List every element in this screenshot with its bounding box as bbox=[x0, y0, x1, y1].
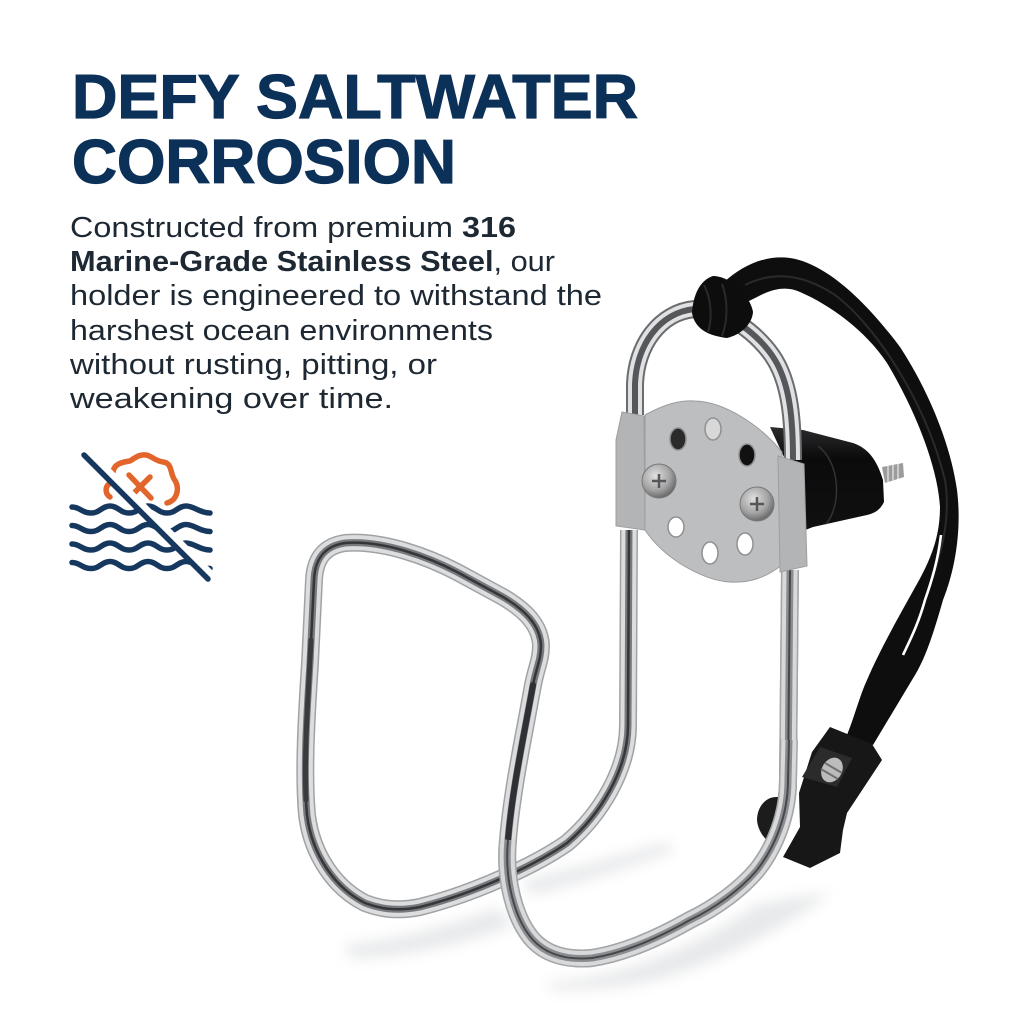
set screw window bbox=[802, 747, 852, 787]
cord strand highlight bbox=[745, 276, 947, 570]
title bbox=[72, 63, 638, 197]
icon: navy waves bbox=[72, 506, 210, 568]
floor shadows bbox=[345, 842, 830, 990]
pan head screws bbox=[642, 464, 774, 521]
icon: no corrosion over waves bbox=[72, 455, 212, 579]
icon: navy slash bbox=[84, 455, 208, 579]
body text block: Constructed from premium 316 bbox=[70, 212, 516, 244]
plate holes bbox=[668, 418, 755, 564]
body text block: without rusting, pitting, or bbox=[69, 349, 438, 381]
threaded bolt bbox=[882, 463, 904, 483]
icon: orange corrosion cloud with x bbox=[106, 455, 177, 503]
bungee cord bbox=[722, 257, 959, 745]
side brackets bbox=[616, 412, 807, 572]
title: CORROSION bbox=[72, 128, 456, 197]
icon: white gap beside slash bbox=[92, 455, 212, 575]
black cord hook bbox=[757, 727, 882, 868]
product photo: stainless holder with bungee cord bbox=[305, 257, 959, 990]
dark reflection on center run bbox=[508, 685, 533, 840]
wire frame full run bbox=[305, 530, 790, 958]
wire frame front run at crossing bbox=[507, 570, 790, 958]
body text block: Marine-Grade Stainless Steel , our bbox=[70, 246, 556, 278]
mounting plate with holes bbox=[645, 401, 782, 582]
tube section over hook bbox=[757, 740, 789, 870]
dark reflection on left side bbox=[305, 640, 311, 800]
black mount block bbox=[770, 427, 904, 532]
body text block: harshest ocean environments bbox=[70, 315, 493, 347]
title: DEFY SALTWATER bbox=[72, 63, 638, 132]
cord split gap bbox=[903, 535, 941, 655]
body text block bbox=[69, 212, 602, 415]
body text block: holder is engineered to withstand the bbox=[70, 280, 602, 312]
body text block: weakening over time. bbox=[69, 383, 393, 415]
upper arch tube bbox=[635, 309, 793, 460]
cord knot bbox=[692, 276, 753, 338]
